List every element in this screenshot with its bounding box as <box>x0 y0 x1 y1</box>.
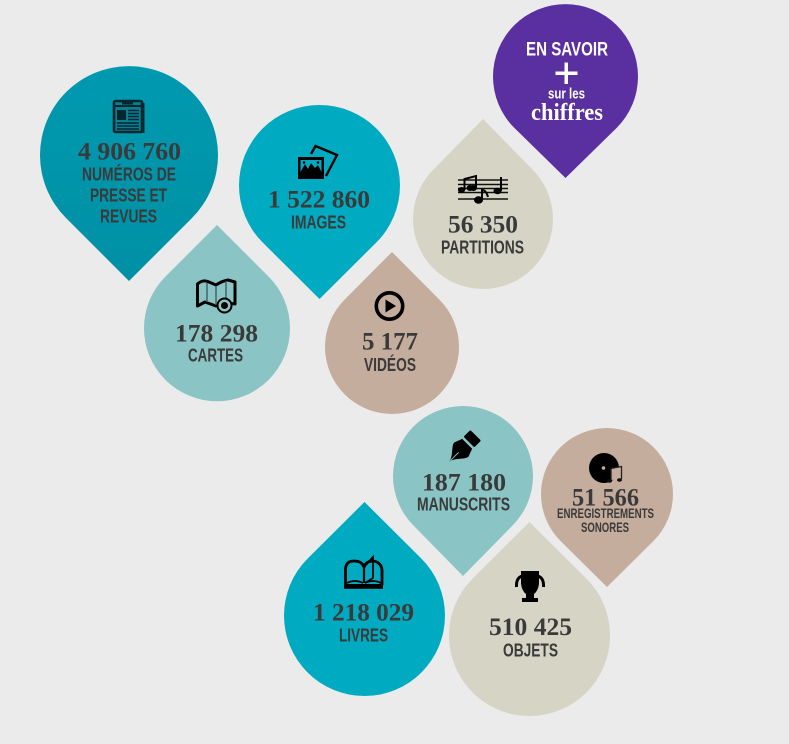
drop: images <box>239 105 400 299</box>
label: ENREGISTREMENTS <box>557 505 654 521</box>
number: 1 218 029 <box>313 598 414 626</box>
number: 1 522 860 <box>268 184 370 214</box>
number: 187 180 <box>422 468 506 496</box>
icon: open book <box>344 557 383 589</box>
label: OBJETS <box>503 640 558 660</box>
heading: en savoir: EN SAVOIR <box>526 40 608 60</box>
icon: play <box>376 293 403 319</box>
label: MANUSCRITS <box>417 494 510 514</box>
label: PRESSE ET <box>90 186 167 206</box>
label <box>557 505 654 535</box>
icon: plus <box>556 62 578 84</box>
text: chiffres: chiffres <box>531 100 603 126</box>
icon: newspaper <box>114 101 144 133</box>
label: SONORES <box>581 519 629 535</box>
icon: map <box>198 280 235 312</box>
number: 510 425 <box>489 612 572 641</box>
number: 56 350 <box>448 210 518 238</box>
label: PARTITIONS <box>441 238 524 258</box>
label <box>82 164 176 226</box>
icon: trophy <box>516 571 544 602</box>
label: VIDÉOS <box>364 354 416 375</box>
text: sur les: sur les <box>548 86 585 102</box>
drop: en savoir plus <box>493 4 638 178</box>
drop: cartes <box>144 225 290 401</box>
icon: record and note <box>589 453 622 483</box>
drop: partitions <box>413 119 553 289</box>
label: NUMÉROS DE <box>82 164 176 184</box>
label: IMAGES <box>291 212 346 232</box>
drop: livres <box>284 502 445 696</box>
label: CARTES <box>188 346 243 366</box>
label: LIVRES <box>339 626 388 646</box>
icon: sheet music <box>458 176 508 204</box>
drop: vidéos <box>325 252 459 414</box>
drop: numéros de presse et revues <box>40 66 218 281</box>
number: 4 906 760 <box>78 136 181 166</box>
drop: objets <box>449 522 610 716</box>
number: 51 566 <box>572 482 639 512</box>
drop: enregistrements sonores <box>541 428 673 587</box>
label: REVUES <box>100 206 157 226</box>
number: 178 298 <box>175 318 258 348</box>
number: 5 177 <box>362 326 418 356</box>
icon: fountain pen <box>442 428 483 469</box>
icon: photos <box>298 146 337 179</box>
drop: manuscrits <box>393 406 533 576</box>
